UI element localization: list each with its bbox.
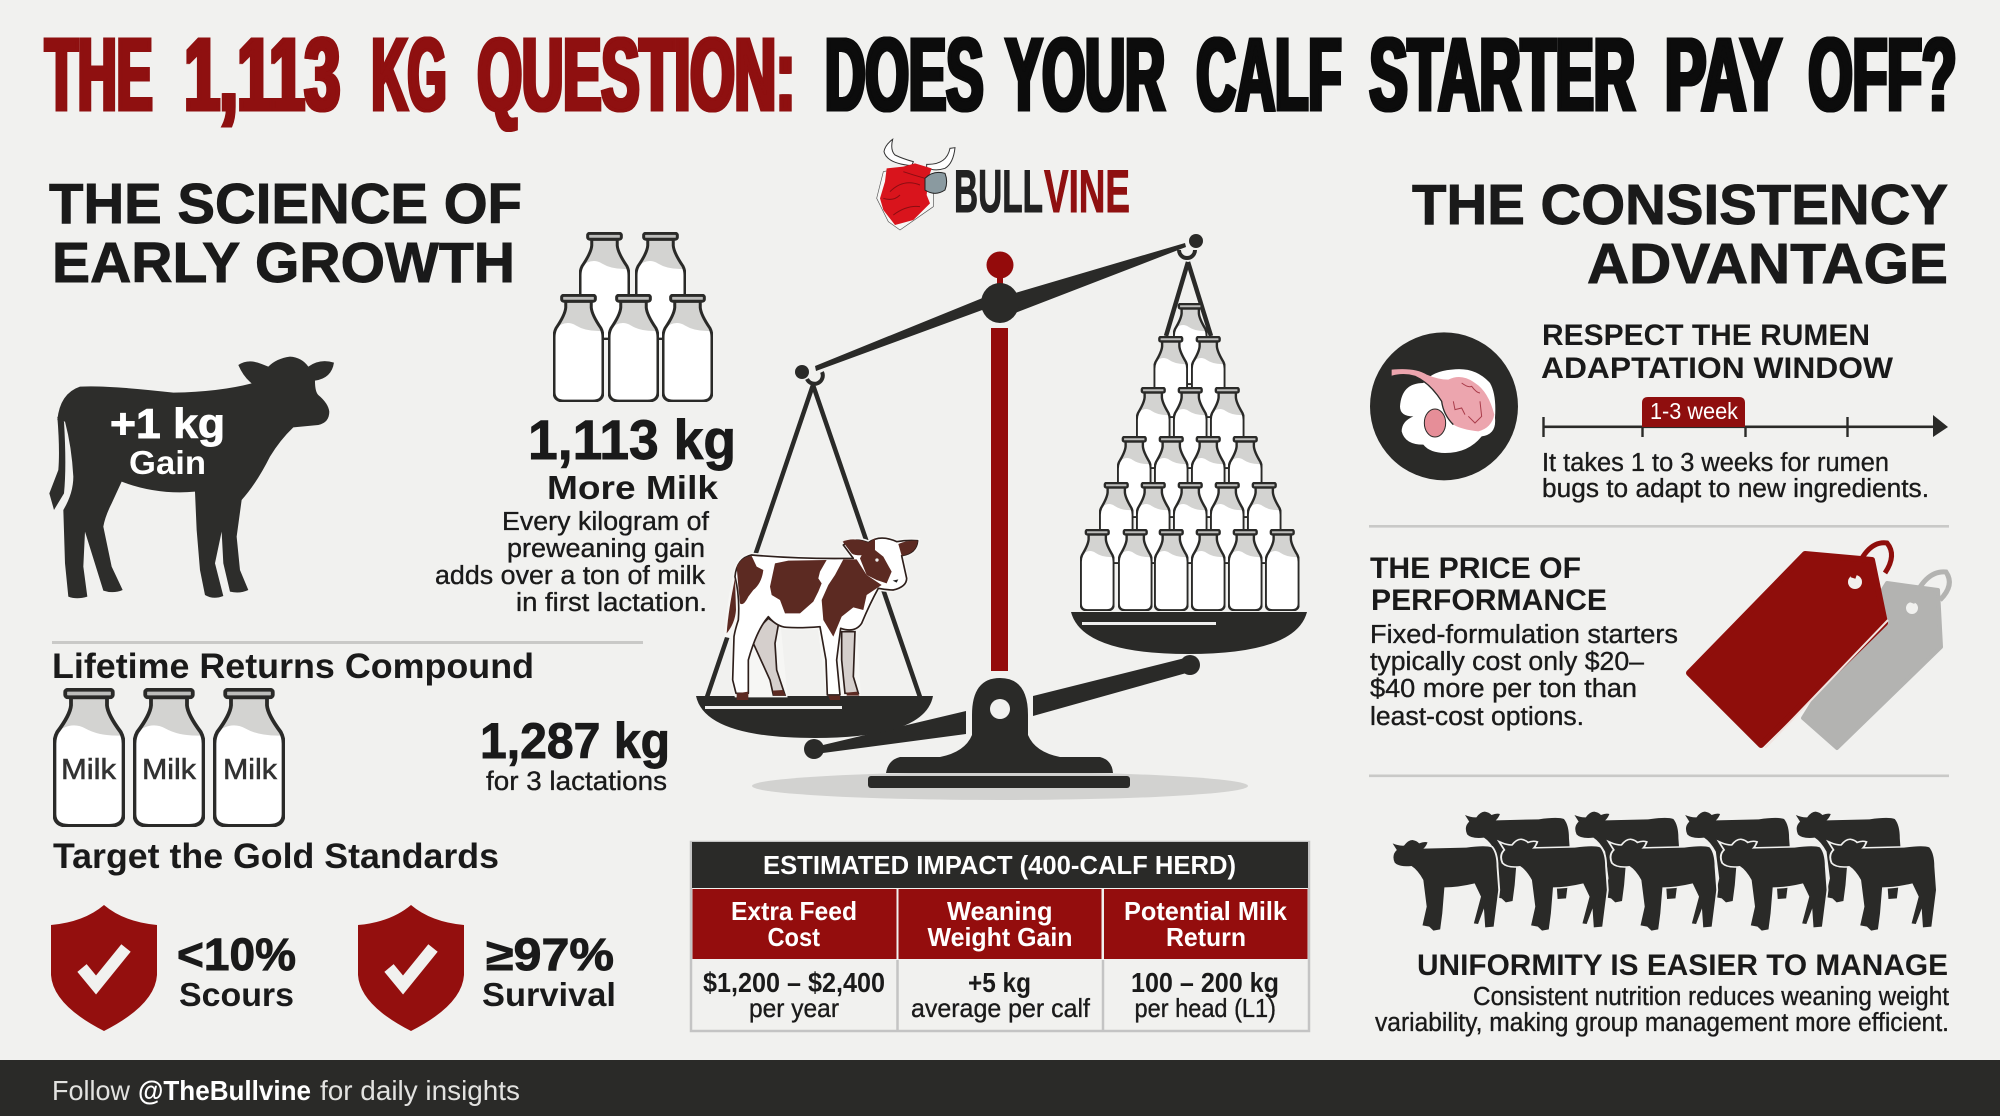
title part: does your calf starter pay off: STARTER — [1370, 17, 1635, 132]
footer bar: for daily insights — [320, 1075, 520, 1106]
heading: the science of early growth: THE SCIENCE OF — [49, 172, 522, 236]
icon: price tags — [1689, 543, 1949, 748]
title part: does your calf starter pay off — [825, 17, 1956, 132]
column: weaning weight gain: +5 kg — [968, 967, 1031, 998]
column: extra feed cost: $1,200 – $2,400 — [703, 967, 885, 998]
heading: uniformity is easier to manage: UNIFORMITY IS EASIER TO MANAGE — [1417, 949, 1948, 982]
heading: respect the rumen adaptation window: RESPECT THE RUMEN — [1542, 319, 1870, 352]
column: weaning weight gain: Weaning — [947, 896, 1052, 926]
stat: 1,287 kg for 3 lactations — [480, 713, 670, 796]
logo: bullvine: BULL — [954, 158, 1043, 225]
timeline: 1-3 week window: 1-3 week — [1650, 398, 1738, 424]
text: price of performance: $40 more per ton than — [1370, 675, 1637, 703]
column: extra feed cost: Extra Feed — [731, 896, 857, 926]
heading: the price of performance: PERFORMANCE — [1371, 584, 1607, 617]
column: weaning weight gain: average per calf — [911, 993, 1091, 1023]
illustration: balance scale — [696, 234, 1307, 800]
text: uniformity explanation — [1375, 983, 1949, 1037]
text: rumen adaptation — [1542, 449, 1929, 503]
title part: the 1,113 kg question: 1,113 — [184, 17, 340, 132]
text: uniformity explanation: Consistent nutrition reduces weaning weight — [1473, 983, 1949, 1011]
icon: herd of calves — [1393, 812, 1936, 931]
heading: respect the rumen adaptation window: ADAPTATION WINDOW — [1541, 352, 1894, 385]
table: estimated impact — [691, 842, 1309, 1031]
column: extra feed cost: per year — [749, 993, 839, 1023]
heading: target the gold standards: Target the Gold Standards — [53, 837, 499, 876]
heading: lifetime returns compound: Lifetime Returns Compound — [52, 647, 534, 686]
heading: the price of performance: THE PRICE OF — [1370, 552, 1581, 585]
column: potential milk return: 100 – 200 kg — [1131, 967, 1279, 998]
title part: the 1,113 kg question: THE — [45, 17, 152, 132]
stat: 1,113 kg more milk: More Milk — [547, 469, 719, 506]
icon: rumen in dark circle — [1370, 332, 1518, 480]
title part: the 1,113 kg question — [45, 17, 795, 132]
column: weaning weight gain: Weight Gain — [928, 922, 1072, 952]
stat: scours target: Scours — [179, 976, 294, 1013]
icon: calf silhouette with gain label: +1 kg — [110, 400, 225, 447]
heading: the consistency advantage — [1412, 173, 1948, 296]
icon: three labelled milk bottles: Milk — [142, 754, 197, 786]
text: preweaning gain explanation: adds over a ton of milk — [435, 562, 705, 590]
icon: three labelled milk bottles: Milk — [61, 754, 117, 786]
title part: does your calf starter pay off: PAY — [1665, 17, 1782, 132]
scale pole — [986, 252, 1014, 671]
text: preweaning gain explanation — [435, 508, 710, 617]
stat: 1,287 kg for 3 lactations: for 3 lactations — [486, 766, 667, 796]
title part: does your calf starter pay off: CALF — [1196, 17, 1342, 132]
column: potential milk return: per head (L1) — [1134, 993, 1276, 1023]
column: potential milk return: Potential Milk — [1124, 896, 1288, 926]
text: preweaning gain explanation: in first lactation. — [516, 589, 707, 617]
icon: calf silhouette with gain label: Gain — [129, 444, 206, 481]
text: price of performance: least-cost options. — [1370, 703, 1584, 731]
title part: the 1,113 kg question: QUESTION: — [478, 17, 795, 132]
text: price of performance: typically cost only $20– — [1370, 648, 1645, 676]
title — [45, 17, 1956, 132]
heading: the consistency advantage: ADVANTAGE — [1587, 232, 1948, 296]
footer bar: Follow — [52, 1075, 131, 1106]
column: potential milk return: Return — [1166, 922, 1246, 952]
heading: the science of early growth: EARLY GROWTH — [52, 231, 515, 295]
heading: the price of performance — [1370, 552, 1607, 617]
column: potential milk return — [1104, 889, 1308, 1023]
left pan chains — [707, 385, 920, 697]
scale ground shadow — [752, 772, 1248, 800]
table header: ESTIMATED IMPACT (400-CALF HERD) — [763, 852, 1236, 880]
right pan — [1071, 612, 1307, 654]
column: weaning weight gain — [898, 889, 1102, 1023]
stat: scours target: <10% — [177, 929, 296, 980]
icon: calf silhouette with gain label — [49, 357, 334, 598]
column: extra feed cost — [692, 889, 896, 1023]
column: extra feed cost: Cost — [768, 922, 820, 952]
title part: does your calf starter pay off: YOUR — [1006, 17, 1165, 132]
icon: shield scours — [51, 905, 157, 1031]
icon: shield survival — [358, 905, 464, 1031]
text: preweaning gain explanation: Every kilogram of — [502, 508, 710, 536]
icon: three labelled milk bottles — [54, 690, 284, 826]
heading: the science of early growth — [49, 172, 522, 295]
stat: 1,113 kg more milk: 1,113 kg — [528, 408, 736, 471]
logo icon: bull bursting through paper — [877, 139, 955, 230]
illustration: spotted calf on left pan — [727, 538, 918, 700]
text: rumen adaptation: bugs to adapt to new ingredients. — [1542, 475, 1929, 503]
scale lower beam and pedestal — [804, 655, 1200, 788]
timeline: 1-3 week window — [1543, 397, 1948, 437]
stat: 1,287 kg for 3 lactations: 1,287 kg — [480, 713, 670, 769]
heading: respect the rumen adaptation window — [1541, 319, 1894, 385]
logo: bullvine: VINE — [1044, 158, 1130, 225]
title part: the 1,113 kg question: KG — [372, 17, 446, 132]
text: price of performance — [1370, 621, 1678, 731]
stat: 1,113 kg more milk — [528, 408, 736, 506]
title part: does your calf starter pay off: DOES — [825, 17, 984, 132]
grey tag — [1803, 572, 1949, 748]
logo: bullvine — [877, 139, 1130, 230]
scale top beam — [795, 234, 1203, 384]
table header — [692, 842, 1308, 888]
icon: three labelled milk bottles: Milk — [223, 754, 278, 786]
stat: survival target — [482, 929, 616, 1013]
red tag — [1689, 543, 1892, 748]
footer bar — [0, 1060, 2000, 1116]
heading: the consistency advantage: THE CONSISTENCY — [1412, 173, 1948, 237]
left pan — [696, 696, 933, 738]
stat: scours target — [177, 929, 296, 1013]
text: preweaning gain explanation: preweaning gain — [507, 535, 705, 563]
icon: stacked milk bottles — [554, 233, 712, 401]
stat: survival target: Survival — [482, 976, 616, 1013]
icon: pyramid of milk bottles on right pan — [1081, 304, 1299, 610]
text: price of performance: Fixed-formulation starters — [1370, 621, 1678, 649]
footer bar: @TheBullvine — [138, 1075, 311, 1106]
right pan chains — [1166, 262, 1211, 336]
text: rumen adaptation: It takes 1 to 3 weeks for rumen — [1542, 449, 1889, 477]
text: uniformity explanation: variability, making group management more efficient. — [1375, 1009, 1949, 1037]
stat: survival target: ≥97% — [486, 929, 614, 980]
